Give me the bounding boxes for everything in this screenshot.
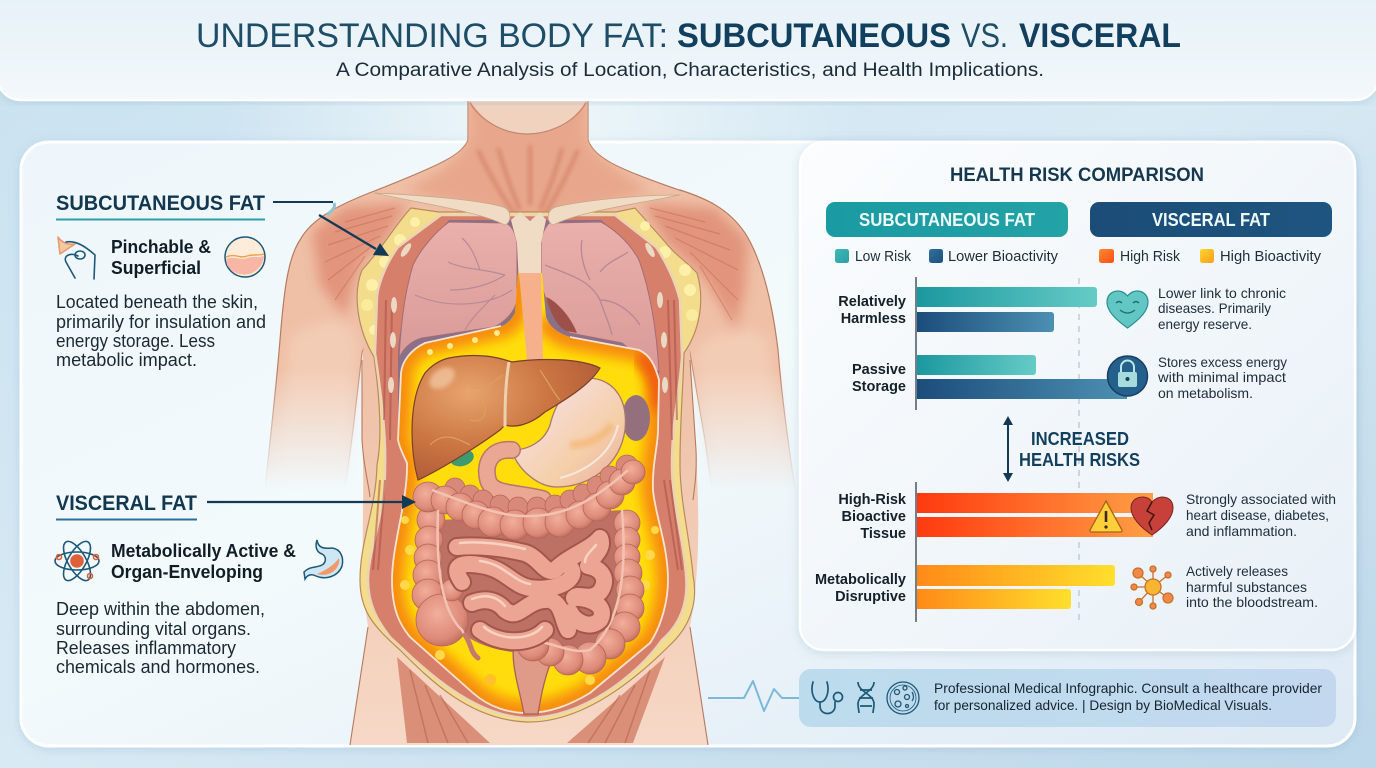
transverse colon <box>413 460 645 540</box>
small intestine base <box>438 510 628 654</box>
description: subcutaneous: energy storage. Less <box>56 331 215 351</box>
rear haustra <box>445 455 638 517</box>
footer text: Professional Medical Infographic. Consult a healthcare provider <box>934 680 1322 696</box>
icon: skin cross-section <box>225 237 265 277</box>
icon: smiling heart <box>1107 291 1148 328</box>
section: visceral fat <box>55 492 416 677</box>
row labels: Metabolically <box>815 572 906 588</box>
row labels: High-Risk <box>838 492 907 508</box>
legend: Lower Bioactivity <box>948 249 1059 265</box>
title: VISCERAL <box>1019 17 1181 55</box>
label: metabolically active and organ-enveloping <box>111 541 296 582</box>
label: pinchable and superficial <box>111 237 211 278</box>
shoulder muscle left <box>312 203 408 317</box>
heading: subcutaneous fat: SUBCUTANEOUS FAT <box>56 192 265 215</box>
callout: increased health risks: INCREASED <box>1031 429 1129 449</box>
description: passive storage: on metabolism. <box>1158 385 1253 401</box>
title <box>196 17 1181 55</box>
title: VS. <box>961 17 1008 55</box>
column header: subcutaneous: SUBCUTANEOUS FAT <box>859 210 1035 230</box>
shoulder muscle right <box>642 203 748 330</box>
column header: visceral: VISCERAL FAT <box>1152 210 1270 230</box>
liver <box>412 355 600 480</box>
icon: pinching hand <box>58 237 95 279</box>
gallbladder <box>451 451 474 466</box>
panel: footer <box>799 669 1336 727</box>
icon: warning triangle <box>1090 501 1122 532</box>
description: subcutaneous: primarily for insulation and <box>56 312 266 332</box>
teniae <box>432 470 628 651</box>
label: metabolically active and organ-enveloping: Metabolically Active & <box>111 541 296 561</box>
footer text <box>934 680 1322 713</box>
legend <box>835 249 1322 265</box>
callout: increased health risks: HEALTH RISKS <box>1019 450 1140 470</box>
label: metabolically active and organ-enveloping: Organ-Enveloping <box>111 562 263 582</box>
descending colon <box>517 510 644 675</box>
icon: molecule network <box>1131 566 1173 609</box>
description: visceral: surrounding vital organs. <box>56 619 251 639</box>
icon: atom <box>55 537 99 585</box>
subcutaneous fat layer <box>357 208 701 722</box>
appendix <box>465 635 478 658</box>
column header: visceral <box>1090 202 1332 237</box>
description: subcutaneous: metabolic impact. <box>56 350 197 370</box>
rectum <box>512 651 550 715</box>
description: visceral <box>56 599 265 677</box>
icon: dna helix <box>858 682 874 713</box>
lower abdominal muscles <box>397 657 665 743</box>
description: passive storage: Stores excess energy <box>1158 354 1287 370</box>
neck and chin <box>411 101 645 212</box>
label: pinchable and superficial: Pinchable & <box>111 237 211 257</box>
visceral fat <box>385 265 675 720</box>
arrow: subcutaneous pointer <box>273 202 389 256</box>
title: UNDERSTANDING BODY FAT: <box>196 17 668 55</box>
description: subcutaneous <box>56 292 266 370</box>
right lung <box>541 222 659 372</box>
panel: health risk comparison <box>800 142 1355 650</box>
legend: High Bioactivity <box>1220 249 1322 265</box>
description: visceral: Deep within the abdomen, <box>56 599 265 619</box>
legend: Low Risk <box>855 249 912 265</box>
heading: visceral fat: VISCERAL FAT <box>56 492 197 515</box>
row labels: Relatively <box>838 294 906 310</box>
description: high-risk bioactive tissue: Strongly associated with <box>1186 491 1336 507</box>
visceral fat rim <box>392 326 668 713</box>
description: relatively harmless: diseases. Primarily <box>1158 300 1271 316</box>
description: relatively harmless <box>1158 285 1286 332</box>
description: metabolically disruptive: into the bloodstream. <box>1186 594 1318 610</box>
description: high-risk bioactive tissue: heart disease, diabetes, <box>1186 507 1329 523</box>
anatomical torso illustration <box>265 100 795 745</box>
icon: microbes in dish <box>887 682 919 714</box>
body outlines <box>350 100 708 745</box>
arrow: increased risk <box>1003 416 1013 482</box>
clavicles and sternum <box>374 192 680 273</box>
column header: subcutaneous <box>826 202 1068 237</box>
right arm <box>680 189 794 484</box>
callout: increased health risks <box>1019 429 1140 470</box>
description: high-risk bioactive tissue: and inflammation. <box>1186 523 1297 539</box>
description: passive storage: with minimal impact <box>1157 369 1286 385</box>
row labels: Harmless <box>841 311 906 327</box>
icon: broken heart <box>1131 497 1173 535</box>
panel: main body panel <box>21 142 1355 746</box>
row labels: Tissue <box>860 526 906 542</box>
axis lines <box>915 277 917 622</box>
description: metabolically disruptive: harmful substances <box>1186 579 1307 595</box>
description: subcutaneous: Located beneath the skin, <box>56 292 258 312</box>
small intestine loops <box>457 538 604 641</box>
spleen <box>622 395 650 441</box>
title: SUBCUTANEOUS <box>677 17 951 55</box>
stomach <box>487 378 625 499</box>
panel: header <box>0 0 1376 100</box>
decorative heartbeat line <box>708 681 799 711</box>
icon: stethoscope <box>812 682 842 714</box>
footer text: for personalized advice. | Design by BioMedical Visuals. <box>934 697 1272 713</box>
reference line <box>1078 278 1080 622</box>
description: visceral: chemicals and hormones. <box>56 657 260 677</box>
icon: padlock <box>1108 356 1148 396</box>
subtitle: A Comparative Analysis of Location, Characteristics, and Health Implications. <box>336 60 1044 81</box>
legend: High Risk <box>1120 249 1181 265</box>
left lung <box>399 222 517 358</box>
icon: stomach <box>304 540 343 579</box>
description: passive storage <box>1157 354 1287 401</box>
description: relatively harmless: energy reserve. <box>1158 316 1252 332</box>
bar chart: visceral rows <box>917 493 1153 609</box>
description: high-risk bioactive tissue <box>1186 491 1336 539</box>
ascending colon and cecum <box>412 506 468 646</box>
heading: health risk comparison: HEALTH RISK COMPARISON <box>950 165 1204 186</box>
arrow: visceral pointer <box>207 495 416 509</box>
row labels: Storage <box>852 379 906 395</box>
description: metabolically disruptive <box>1186 563 1318 610</box>
bar chart: subcutaneous rows <box>917 287 1127 399</box>
section: subcutaneous fat <box>56 192 389 370</box>
large intestine <box>412 455 645 714</box>
label: pinchable and superficial: Superficial <box>111 258 201 278</box>
left arm <box>266 189 378 484</box>
row labels <box>815 294 907 605</box>
muscle wall <box>368 215 687 718</box>
row labels: Disruptive <box>835 589 906 605</box>
chest cavity background <box>398 220 659 420</box>
description: metabolically disruptive: Actively releases <box>1186 563 1288 579</box>
description: relatively harmless: Lower link to chronic <box>1158 285 1286 301</box>
row labels: Bioactive <box>842 509 906 525</box>
row labels: Passive <box>852 362 906 378</box>
torso skin <box>350 100 708 745</box>
description: visceral: Releases inflammatory <box>56 638 236 658</box>
